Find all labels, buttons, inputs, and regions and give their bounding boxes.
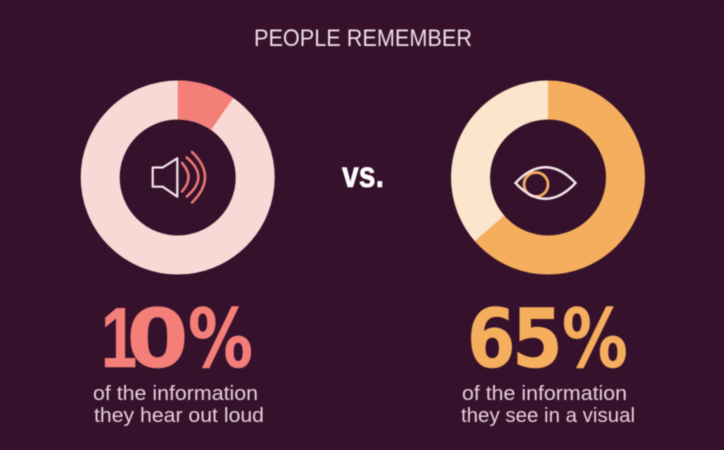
donut chart: 10 percent xyxy=(100,80,255,255)
stat: 10%: % xyxy=(188,293,253,387)
icon: eye xyxy=(516,167,576,199)
panel: hearing xyxy=(93,80,264,427)
stat: 10%: 1 xyxy=(101,290,137,385)
stat: 10% xyxy=(101,290,253,387)
stat: 10%: 0 xyxy=(126,293,188,387)
caption: hearing xyxy=(93,383,264,427)
caption: seeing xyxy=(461,383,635,427)
stat: 65%: 6 xyxy=(467,292,515,386)
caption: hearing: of the information xyxy=(93,383,258,405)
panel: seeing xyxy=(451,80,635,427)
stat: 65% xyxy=(467,292,628,387)
caption: hearing: they hear out loud xyxy=(94,405,264,427)
donut chart: 65 percent xyxy=(451,80,626,255)
caption: seeing: they see in a visual xyxy=(461,405,635,427)
caption: seeing: of the information xyxy=(462,383,627,405)
stat: 65%: % xyxy=(562,293,628,387)
comparison label: vs. xyxy=(342,154,384,195)
stat: 65%: 5 xyxy=(512,292,563,387)
title: PEOPLE REMEMBER xyxy=(254,25,472,52)
icon: speaker xyxy=(153,152,205,202)
